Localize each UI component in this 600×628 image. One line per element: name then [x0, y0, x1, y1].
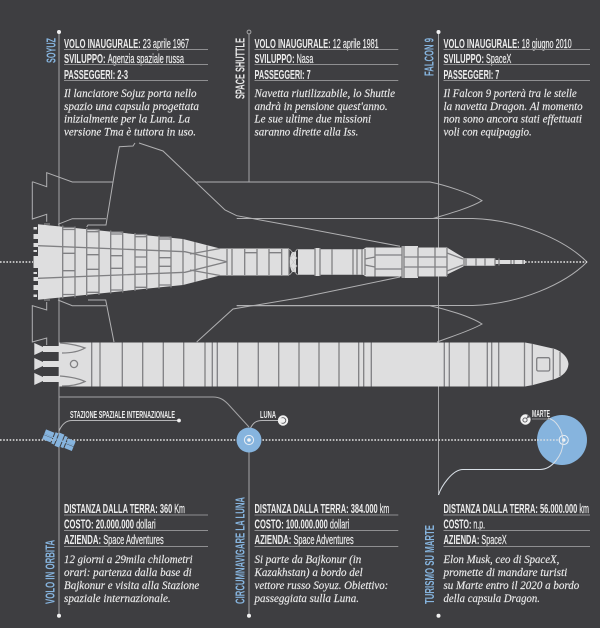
description: Space Shuttle: Le sue ultime due missioni: [254, 114, 371, 126]
description: Space Shuttle: saranno dirette alla Iss.: [254, 126, 358, 138]
spec rows: Turismo su Marte: COSTO: n.p.: [444, 516, 485, 532]
spec rows: Soyuz: [64, 36, 208, 82]
description: Soyuz: versione Tma è tuttora in uso.: [64, 126, 196, 138]
description: Volo in orbita: 12 giorni a 29mila chilometri: [64, 554, 193, 566]
panel: Space Shuttle: [232, 36, 398, 138]
description: Space Shuttle: Navetta riutilizzabile, lo Shuttle: [254, 88, 395, 100]
dot: [436, 614, 440, 618]
spec rows: Falcon 9: PASSEGGERI: 7: [444, 67, 499, 82]
planet: Luna: [236, 428, 262, 452]
spec rows: Circumnavigare la Luna: [254, 501, 398, 547]
description: Turismo su Marte: su Marte entro il 2020 a bordo: [444, 580, 580, 592]
panel: Falcon 9: [422, 36, 590, 138]
description: Space Shuttle: andrà in pensione quest'anno.: [254, 101, 388, 113]
description: Turismo su Marte: [443, 554, 580, 605]
callout: Stazione spaziale internazionale: STAZIONE SPAZIALE INTERNAZIONALE: [70, 409, 175, 421]
label: Turismo su Marte: TURISMO SU MARTE: [422, 525, 437, 604]
label: Falcon 9: FALCON 9: [422, 38, 436, 76]
description: Falcon 9: non sono ancora stati effettuati: [444, 114, 582, 126]
description: Falcon 9: [443, 88, 583, 138]
spec rows: Turismo su Marte: [444, 501, 590, 547]
description: Falcon 9: la navetta Dragon. Al momento: [444, 101, 583, 113]
description: Turismo su Marte: promette di mandare turisti: [443, 567, 567, 579]
description: Volo in orbita: [64, 554, 199, 605]
spec rows: Space Shuttle: [254, 36, 398, 82]
spec rows: Soyuz: VOLO INAUGURALE: 23 aprile 1967: [64, 36, 189, 51]
label: Soyuz: SOYUZ: [44, 38, 58, 63]
spec rows: Soyuz: PASSEGGERI: 2-3: [64, 67, 128, 82]
guide dots top: [57, 30, 440, 34]
description: Volo in orbita: spaziale internazionale.: [64, 593, 171, 605]
spec rows: Volo in orbita: COSTO: 20.000.000 dollari: [64, 516, 156, 532]
Soyuz rocket: [34, 224, 525, 300]
spec rows: Volo in orbita: AZIENDA: Space Adventures: [64, 532, 164, 547]
description: Volo in orbita: orari: partenza dalla base di: [64, 567, 192, 579]
Falcon 9 engines: [34, 343, 59, 385]
description: Falcon 9: Il Falcon 9 porterà tra le stelle: [443, 88, 577, 100]
truss between stages: [290, 249, 298, 275]
dot: [57, 614, 61, 618]
callout: Luna: [250, 409, 288, 428]
spec rows: Circumnavigare la Luna: COSTO: 100.000.000 dollari: [254, 516, 349, 532]
panel: Soyuz: [44, 36, 208, 138]
label: Volo in orbita: VOLO IN ORBITA: [42, 540, 58, 604]
description: Circumnavigare la Luna: vettore russo Soyuz. Obiettivo:: [254, 580, 388, 592]
description: Volo in orbita: Bajkonur e visita alla Stazione: [64, 580, 199, 592]
panel: Circumnavigare la Luna: [232, 497, 398, 618]
description: Soyuz: inizialmente per la Luna. La: [64, 114, 190, 126]
panel: Volo in orbita: [42, 501, 208, 618]
callout: Luna: LUNA: [260, 409, 276, 421]
description: Turismo su Marte: Elon Musk, ceo di SpaceX,: [443, 554, 559, 566]
callout: Marte: MARTE: [532, 408, 550, 420]
spec rows: Circumnavigare la Luna: DISTANZA DALLA TERRA: 384.000 km: [254, 501, 389, 516]
description: Circumnavigare la Luna: Si parte da Bajkonur (in: [254, 554, 362, 566]
dot: [247, 614, 251, 618]
spec rows: Soyuz: SVILUPPO: Agenzia spaziale russa: [64, 51, 184, 66]
description: Circumnavigare la Luna: passeggiata sulla Luna.: [254, 593, 359, 605]
spec rows: Space Shuttle: SVILUPPO: Nasa: [254, 51, 313, 66]
Soyuz engines: [34, 227, 38, 297]
callout line: Luna mission: [59, 397, 249, 427]
shuttle wireframe outline: [32, 143, 587, 345]
description: Circumnavigare la Luna: [254, 554, 388, 605]
vertical guide lines: [59, 32, 438, 616]
spec rows: Volo in orbita: DISTANZA DALLA TERRA: 360 Km: [64, 501, 185, 516]
Falcon 9 rocket: [34, 342, 569, 386]
callout: Stazione spaziale internazionale: [59, 409, 181, 431]
spec rows: Circumnavigare la Luna: AZIENDA: Space Adventures: [254, 532, 354, 547]
panel: Turismo su Marte: [422, 501, 590, 618]
spec rows: Space Shuttle: VOLO INAUGURALE: 12 aprile 1981: [254, 36, 379, 51]
description: Soyuz: spazio una capsula progettata: [64, 101, 199, 113]
planet: Marte: [537, 415, 587, 465]
spec rows: Falcon 9: [444, 36, 590, 82]
spec rows: Falcon 9: SVILUPPO: SpaceX: [444, 51, 512, 66]
callout: Marte: [438, 408, 563, 495]
description: Soyuz: [63, 88, 199, 138]
description: Falcon 9: voli con equipaggio.: [444, 126, 532, 138]
dotted centre lines: [0, 262, 587, 440]
spec rows: Volo in orbita: [64, 501, 208, 547]
description: Soyuz: Il lanciatore Sojuz porta nello: [63, 88, 197, 100]
icon: ISS: [42, 428, 76, 452]
spec rows: Space Shuttle: PASSEGGERI: 7: [254, 67, 311, 82]
description: Circumnavigare la Luna: Kazakhstan) a bordo del: [254, 567, 363, 579]
spec rows: Turismo su Marte: AZIENDA: SpaceX: [444, 532, 507, 547]
description: Space Shuttle: [254, 88, 395, 138]
description: Turismo su Marte: della capsula Dragon.: [444, 593, 540, 605]
label: Circumnavigare la Luna: CIRCUMNAVIGARE LA LUNA: [232, 497, 248, 604]
